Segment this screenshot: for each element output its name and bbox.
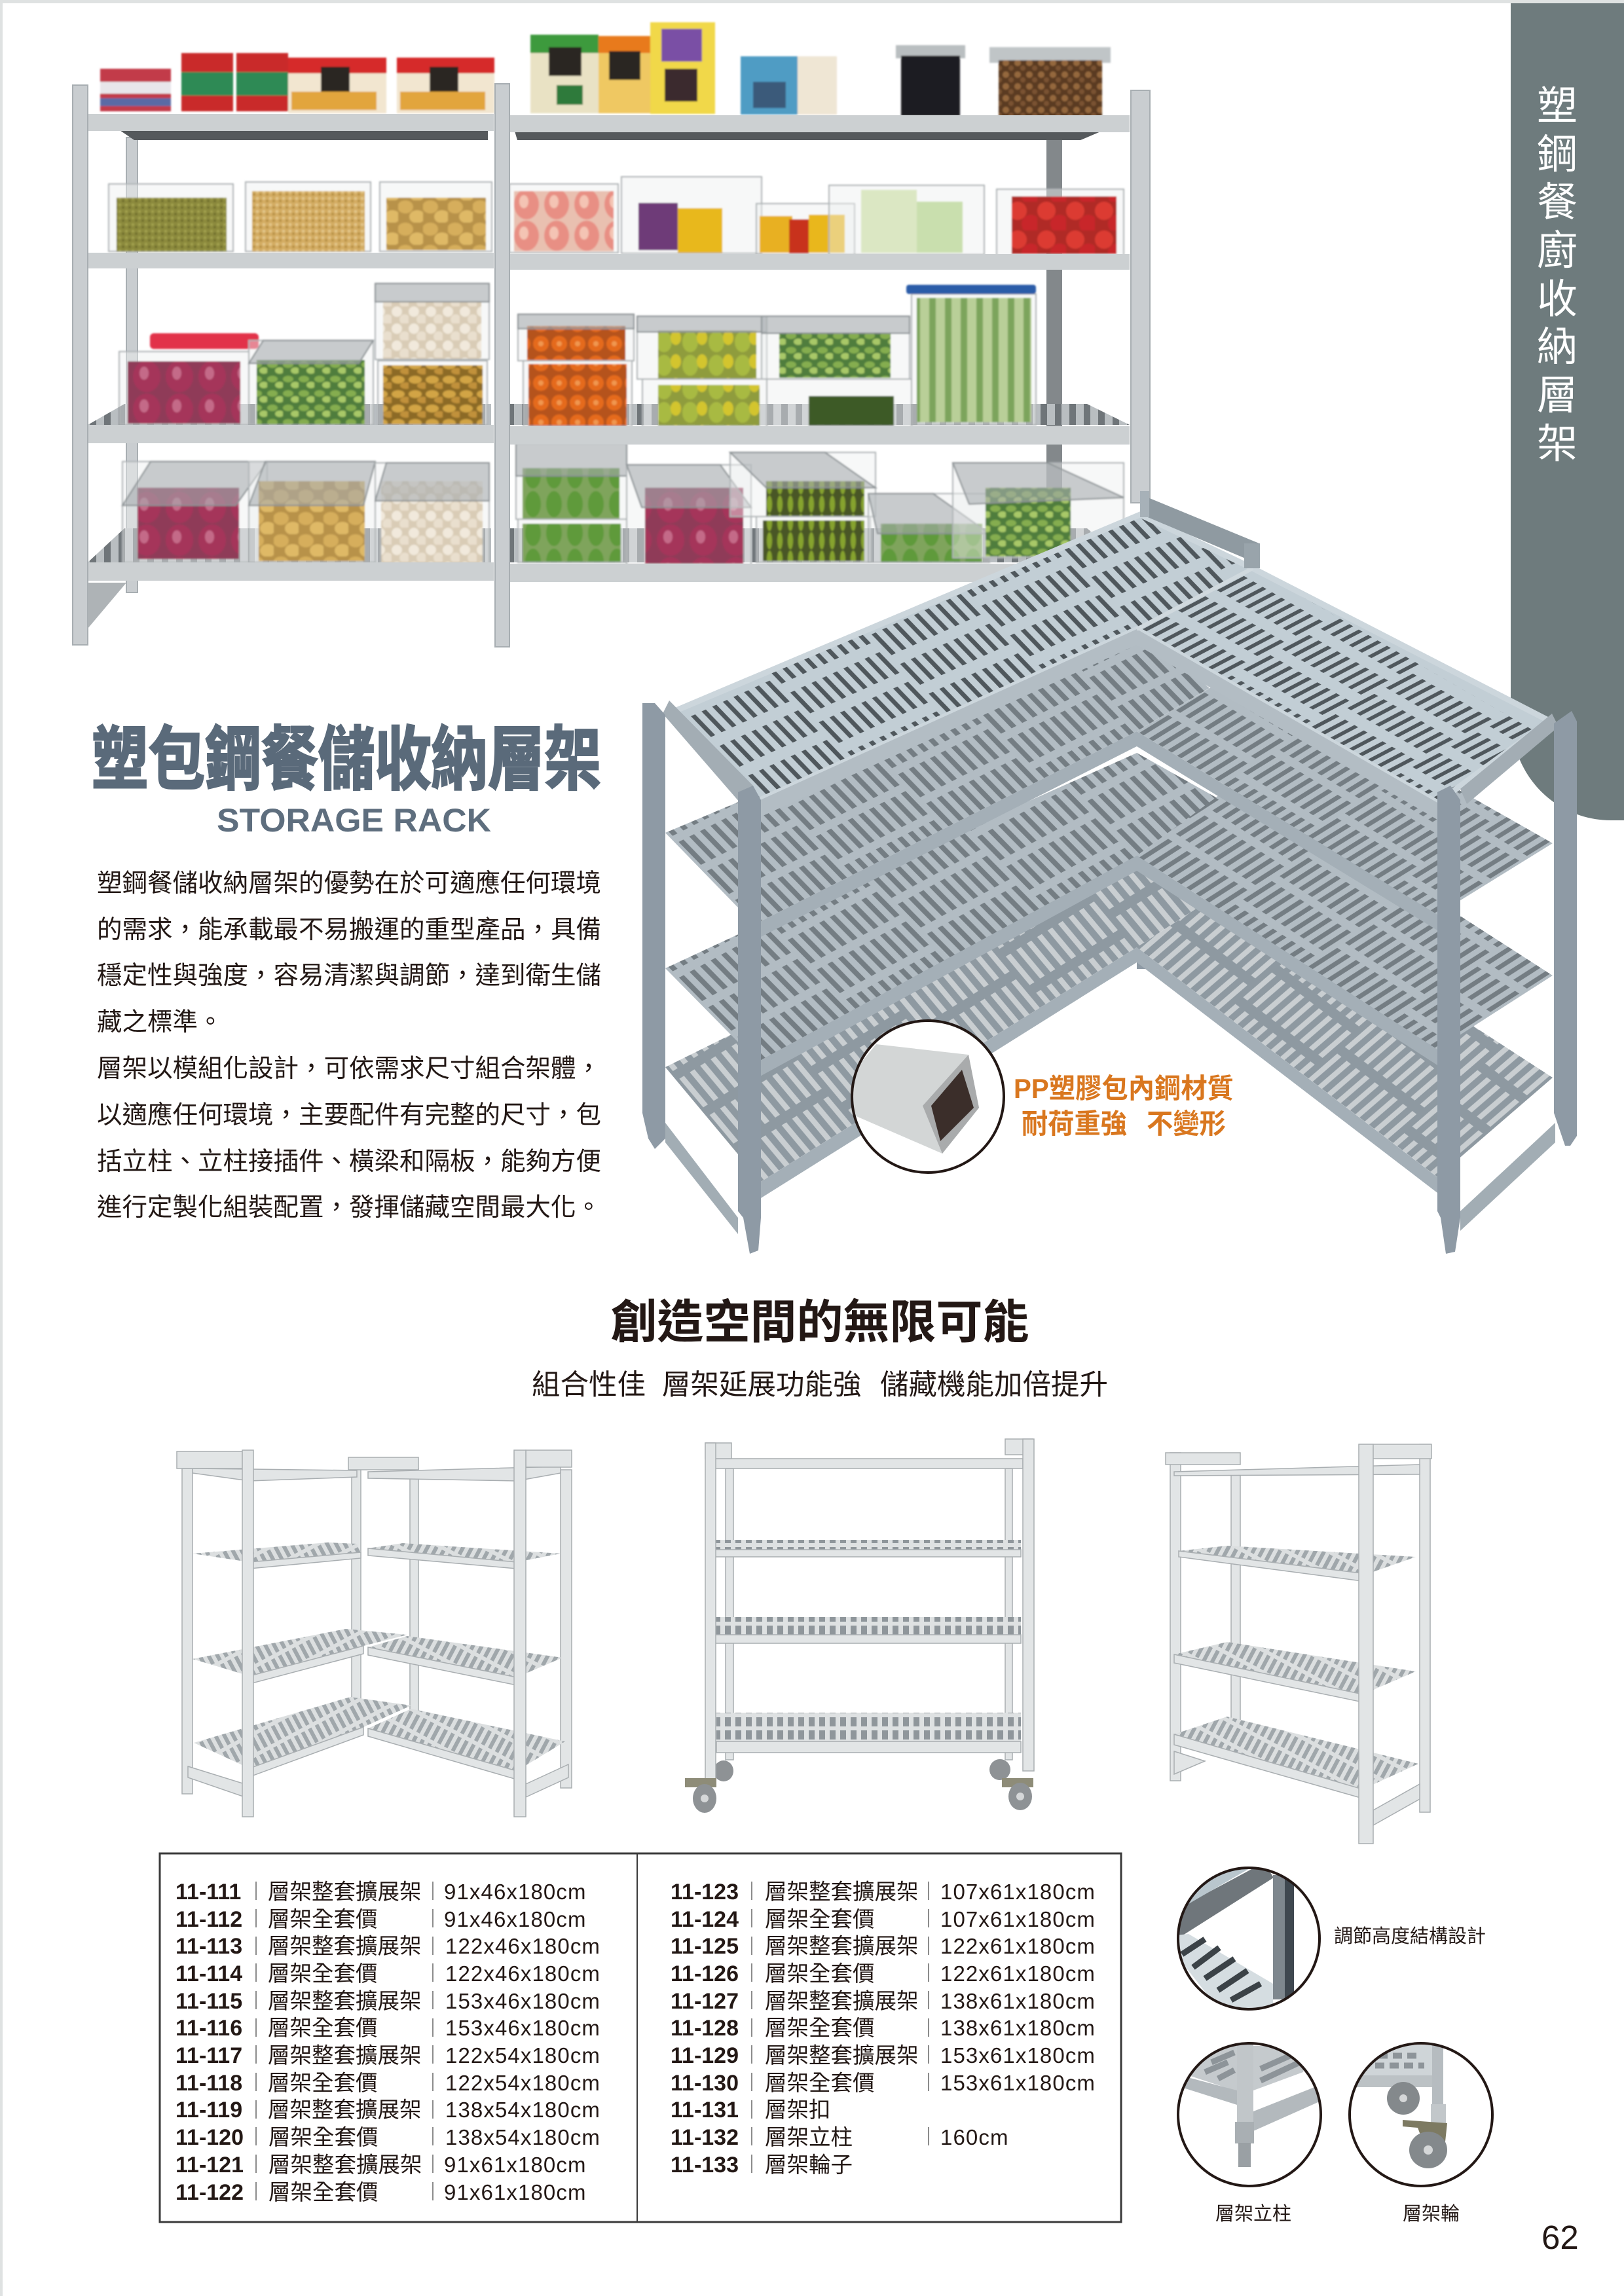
label: height adjustment: 調節高度結構設計 xyxy=(1334,1925,1486,1947)
cart rear wheels xyxy=(714,1759,1010,1781)
left column item names: 層架整套擴展架 xyxy=(268,1990,422,2014)
rack shelf undersides xyxy=(118,129,1107,140)
left column item names: 層架全套價 xyxy=(268,2181,378,2205)
photo: L-shaped corner rack xyxy=(642,491,1577,1254)
right column item names: 層架全套價 xyxy=(765,2016,875,2041)
description text: 進行定製化組裝配置，發揮儲藏空間最大化。 xyxy=(97,1194,601,1222)
food row 2: clear containers xyxy=(109,177,1124,256)
right column item codes: 11-129 xyxy=(671,2043,739,2068)
corner rack posts xyxy=(642,703,1577,1254)
right column sizes xyxy=(940,1880,1096,2149)
left column item names: 層架整套擴展架 xyxy=(268,2098,422,2123)
corner rack back post xyxy=(1137,943,1146,969)
corner unit shelves xyxy=(193,1467,565,1779)
rack rear posts xyxy=(126,137,1062,592)
right column item codes: 11-126 xyxy=(671,1961,739,1986)
left column item codes: 11-121 xyxy=(175,2153,244,2178)
callout: PP plastic steel core: PP塑膠包內鋼材質 xyxy=(1014,1073,1234,1104)
right column item codes: 11-123 xyxy=(671,1880,739,1904)
left column item codes: 11-120 xyxy=(175,2125,244,2150)
left column item codes: 11-115 xyxy=(175,1989,242,2014)
corner unit rear posts xyxy=(182,1468,572,1794)
right column item names: 層架全套價 xyxy=(765,1962,875,1986)
cart top plates xyxy=(705,1439,1033,1459)
right column item codes: 11-124 xyxy=(671,1907,739,1932)
description text: 以適應任何環境，主要配件有完整的尺寸，包 xyxy=(97,1101,601,1129)
straight unit front post xyxy=(1359,1444,1373,1844)
corner rack bottom deck xyxy=(665,854,1553,1198)
right column sizes: 153x61x180cm xyxy=(940,2043,1096,2068)
right column item codes: 11-127 xyxy=(671,1989,739,2014)
callout: PP plastic steel core xyxy=(1014,1073,1234,1139)
photo: shelf unit on wheels xyxy=(685,1439,1034,1813)
corner rack third deck xyxy=(665,753,1553,1076)
left column item codes: 11-122 xyxy=(175,2180,244,2205)
straight unit shelves xyxy=(1174,1465,1420,1798)
left column sizes: 122x54x180cm xyxy=(445,2043,600,2068)
right column item names: 層架整套擴展架 xyxy=(765,1935,918,1959)
table column separators xyxy=(256,1882,929,2200)
section heading: 創造空間的無限可能 xyxy=(610,1297,1029,1349)
photo: corner shelf unit xyxy=(177,1450,572,1817)
callout: PP plastic steel core: 耐荷重強 xyxy=(1022,1108,1127,1139)
food row 4: containers with lids xyxy=(122,443,1124,565)
photo: straight shelf unit xyxy=(1166,1444,1431,1844)
left column item names: 層架全套價 xyxy=(268,1962,377,1986)
right column item codes: 11-128 xyxy=(671,2016,739,2041)
left column sizes: 122x46x180cm xyxy=(445,1961,600,1986)
left column item codes: 11-116 xyxy=(175,2016,242,2041)
label: shelf post: 層架立柱 xyxy=(1215,2203,1291,2225)
straight unit top plates and stretchers xyxy=(1166,1444,1431,1825)
description text xyxy=(97,869,601,1222)
left column item names: 層架整套擴展架 xyxy=(268,2153,422,2178)
right column item names: 層架立柱 xyxy=(765,2126,853,2150)
cart front wheels xyxy=(685,1778,1033,1813)
left column sizes: 138x54x180cm xyxy=(445,2125,600,2149)
right column item names: 層架整套擴展架 xyxy=(765,2044,918,2068)
description text: 藏之標準。 xyxy=(97,1008,223,1036)
corner rack rails xyxy=(663,491,1559,804)
left column sizes: 91x61x180cm xyxy=(444,2153,587,2177)
inset circle: steel tube cross-section xyxy=(849,1021,1004,1173)
corner rack top deck xyxy=(676,511,1548,820)
right column item names: 層架扣 xyxy=(765,2098,830,2123)
cart shelves xyxy=(714,1459,1023,1753)
left column item codes xyxy=(175,1880,244,2205)
right column item names: 層架輪子 xyxy=(765,2153,853,2178)
left column item names xyxy=(268,1880,422,2205)
corner unit front posts xyxy=(242,1450,526,1817)
right column sizes: 122x61x180cm xyxy=(940,1961,1096,1986)
left column sizes: 91x61x180cm xyxy=(444,2180,587,2204)
left column sizes: 122x54x180cm xyxy=(445,2071,600,2095)
right column item codes: 11-131 xyxy=(671,2098,739,2123)
right column item codes: 11-125 xyxy=(671,1934,739,1959)
left column sizes: 122x46x180cm xyxy=(445,1934,600,1958)
left column item names: 層架整套擴展架 xyxy=(268,1935,422,1959)
food row 1: packaged goods xyxy=(100,22,1111,117)
corner rack second deck xyxy=(665,645,1553,937)
left column item codes: 11-117 xyxy=(175,2043,242,2068)
detail circle: height adjustment xyxy=(1172,1863,1320,2016)
left column item names: 層架整套擴展架 xyxy=(268,2044,422,2068)
detail circle: shelf wheel xyxy=(1350,2043,1492,2186)
callout: PP plastic steel core: 不變形 xyxy=(1147,1108,1226,1139)
left column item codes: 11-111 xyxy=(175,1880,241,1904)
left column item codes: 11-112 xyxy=(175,1907,242,1932)
description text: 穩定性與強度，容易清潔與調節，達到衛生儲 xyxy=(97,962,601,990)
left column item codes: 11-114 xyxy=(175,1961,242,1986)
description text: 塑鋼餐儲收納層架的優勢在於可適應任何環境 xyxy=(97,869,601,898)
left column item names: 層架全套價 xyxy=(268,1908,377,1932)
left column item names: 層架全套價 xyxy=(268,2071,377,2096)
left column item names: 層架整套擴展架 xyxy=(268,1880,422,1904)
right column item codes: 11-130 xyxy=(671,2071,739,2096)
corner rack bottom stretchers xyxy=(665,1123,1555,1234)
left column sizes: 138x54x180cm xyxy=(445,2098,600,2122)
food row 3: stacked containers and celery xyxy=(119,283,1036,427)
right column item codes xyxy=(671,1880,739,2178)
right column sizes: 107x61x180cm xyxy=(940,1880,1096,1904)
section subheading: 組合性佳 xyxy=(532,1370,646,1401)
right column sizes: 160cm xyxy=(940,2125,1009,2149)
rack front posts xyxy=(73,84,1150,647)
photo: stocked storage rack with food containers xyxy=(73,22,1150,647)
product table xyxy=(160,1853,1121,2222)
subtitle: STORAGE RACK: STORAGE RACK xyxy=(217,802,491,839)
right column item names: 層架整套擴展架 xyxy=(765,1990,918,2014)
straight unit rear posts xyxy=(1170,1444,1430,1812)
left column item codes: 11-113 xyxy=(175,1934,242,1959)
rack shelf front beams xyxy=(88,114,1130,582)
left column item codes: 11-119 xyxy=(175,2098,242,2123)
cart front posts xyxy=(705,1439,1034,1782)
cart rear posts xyxy=(726,1468,1012,1760)
right column item names: 層架全套價 xyxy=(765,1908,875,1932)
right column sizes: 153x61x180cm xyxy=(940,2071,1096,2095)
right column item names xyxy=(765,1880,918,2178)
left column item codes: 11-118 xyxy=(175,2071,242,2096)
section subheading: 層架延展功能強 xyxy=(662,1370,862,1401)
title: 塑包鋼餐儲收納層架 xyxy=(92,721,601,799)
left column item names: 層架全套價 xyxy=(268,2126,378,2150)
left column sizes: 91x46x180cm xyxy=(444,1907,587,1931)
left column sizes: 153x46x180cm xyxy=(445,1989,600,2013)
left column item names: 層架全套價 xyxy=(268,2016,377,2041)
description text: 的需求，能承載最不易搬運的重型產品，具備 xyxy=(97,916,601,944)
left column sizes xyxy=(444,1880,600,2204)
right column item codes: 11-133 xyxy=(671,2153,739,2178)
corner unit top plates and stretchers xyxy=(177,1450,572,1797)
description text: 層架以模組化設計，可依需求尺寸組合架體， xyxy=(97,1055,601,1083)
side tab vertical title: 塑鋼餐廚收納層架 xyxy=(1537,84,1578,467)
right column sizes: 138x61x180cm xyxy=(940,2016,1096,2040)
right column sizes: 122x61x180cm xyxy=(940,1934,1096,1958)
right column item names: 層架全套價 xyxy=(765,2071,875,2096)
page number: 62 xyxy=(1541,2219,1579,2256)
right column item codes: 11-132 xyxy=(671,2125,739,2150)
rack lower decks xyxy=(88,404,1130,562)
right column item names: 層架整套擴展架 xyxy=(765,1880,918,1904)
label: shelf wheel: 層架輪 xyxy=(1403,2203,1460,2225)
side tab panel xyxy=(1511,3,1624,820)
left column sizes: 153x46x180cm xyxy=(445,2016,600,2040)
description text: 括立柱、立柱接插件、橫梁和隔板，能夠方便 xyxy=(97,1148,601,1176)
left column sizes: 91x46x180cm xyxy=(444,1880,587,1904)
right column sizes: 107x61x180cm xyxy=(940,1907,1096,1931)
right column sizes: 138x61x180cm xyxy=(940,1989,1096,2013)
section subheading: 儲藏機能加倍提升 xyxy=(880,1370,1108,1401)
detail circle: shelf post xyxy=(1178,2043,1321,2186)
